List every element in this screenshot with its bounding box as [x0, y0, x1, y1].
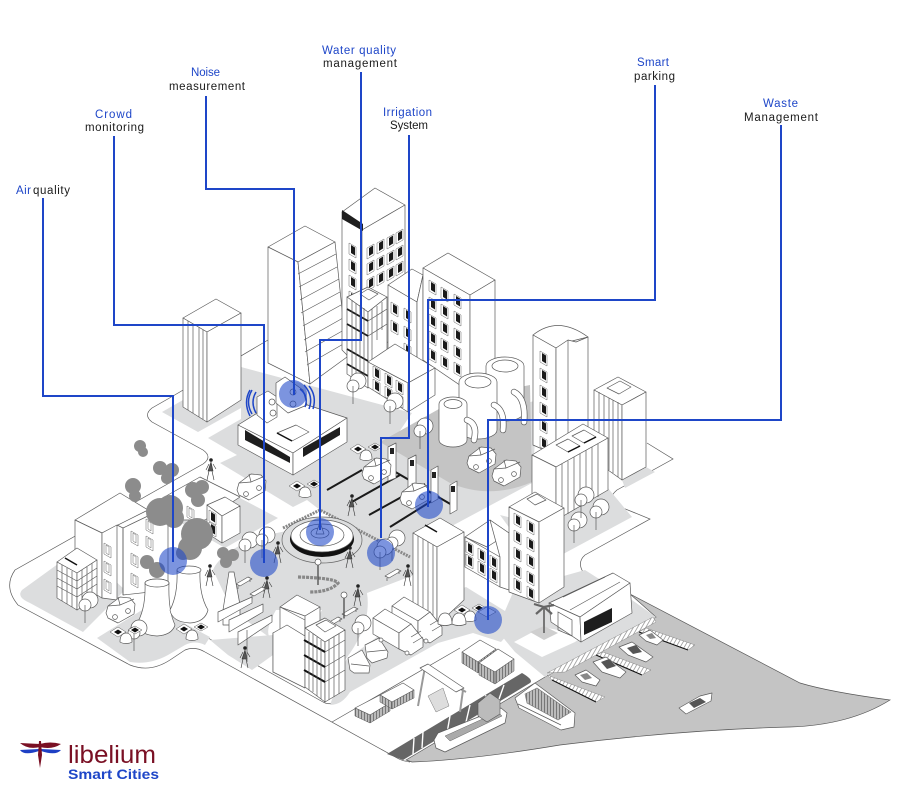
- label: smart parking: parking: [634, 71, 675, 83]
- building: central tall tower: [413, 518, 464, 625]
- water: [406, 594, 890, 762]
- leader line: waste management: [488, 125, 781, 620]
- furniture crates: [348, 615, 388, 673]
- sensor highlight: noise: [279, 380, 307, 408]
- building: left tower: [183, 299, 241, 422]
- leader line: noise measurement: [206, 96, 294, 395]
- fountain: [282, 510, 410, 592]
- label: waste management: Management: [744, 112, 819, 124]
- quay stripes: [387, 673, 531, 760]
- building: low windowed behind: [465, 520, 509, 590]
- sensor highlight: water quality: [306, 518, 334, 546]
- boats: [575, 630, 712, 714]
- sensor highlight: waste: [474, 606, 502, 634]
- plaza trees, benches and lamps: [236, 527, 405, 629]
- building: tall with windows: [342, 188, 405, 370]
- label: air quality: quality: [33, 185, 70, 197]
- factory with saw-tooth roof: [218, 572, 272, 662]
- label: noise measurement: [169, 67, 246, 93]
- smoke clouds: [125, 440, 239, 578]
- leader line: irrigation system: [381, 135, 409, 538]
- label: air quality: Air: [16, 185, 31, 197]
- leader line: air quality: [43, 198, 173, 562]
- label: water quality management: [322, 45, 398, 70]
- people in plaza: [205, 458, 413, 668]
- waste bins on plaza: [289, 443, 382, 498]
- label: smart parking: [634, 57, 675, 83]
- label: crowd monitoring: monitoring: [85, 122, 144, 134]
- icon: sound waves left: [246, 390, 256, 416]
- sensor highlight: smart parking: [415, 491, 443, 519]
- label: smart parking: Smart: [637, 57, 670, 69]
- sensor highlight: irrigation: [367, 539, 395, 567]
- dock building: [549, 573, 632, 642]
- sensor highlight: air quality: [159, 547, 187, 575]
- dark parking area: [380, 385, 532, 491]
- logo: libelium Smart Cities: Smart Cities: [68, 766, 159, 782]
- logo: libelium Smart Cities: [20, 741, 159, 782]
- trees and bins lower left: [79, 592, 208, 651]
- icon: sound waves right: [300, 385, 314, 409]
- leader line: water quality management: [320, 72, 361, 530]
- label: water quality management: Water quality: [322, 45, 396, 57]
- marina piers: [547, 617, 695, 702]
- label: air quality: [16, 185, 70, 197]
- crane: [418, 664, 466, 712]
- label: noise measurement: measurement: [169, 81, 246, 93]
- parking markings and chargers: [237, 443, 521, 527]
- building: left apartments: [75, 493, 168, 600]
- building: small right of factory: [150, 477, 240, 543]
- building: windowed block: [423, 253, 495, 392]
- ground: road outline and lots: [10, 340, 673, 762]
- label: irrigation system: System: [390, 120, 428, 132]
- building: grid block: [57, 548, 97, 610]
- sensor highlight: crowd monitoring: [250, 549, 278, 577]
- building: ribbed block: [532, 424, 608, 520]
- trucks: [373, 597, 442, 655]
- building: right windowed tower: [509, 492, 564, 603]
- label: noise measurement: Noise: [191, 67, 220, 79]
- trees: by low block: [347, 373, 433, 449]
- leader line: crowd monitoring: [114, 136, 264, 563]
- building: curved right tower: [533, 325, 588, 455]
- building: far right tower: [594, 377, 646, 480]
- label: irrigation system: [383, 107, 432, 132]
- leader line: smart parking: [428, 85, 655, 507]
- waste bags and bins: [438, 604, 496, 626]
- label: crowd monitoring: Crowd: [95, 109, 132, 121]
- cargo ships: [434, 683, 575, 752]
- trees: right lot: [568, 487, 609, 543]
- building: low front block: [368, 344, 435, 412]
- building: twisted tower: [268, 226, 347, 384]
- containers yard: [355, 640, 514, 723]
- icon: speakers: [257, 377, 307, 423]
- label: crowd monitoring: [85, 109, 144, 134]
- building: mid block: [388, 269, 423, 392]
- cooling towers: [136, 566, 208, 636]
- building: lower stacked: [304, 618, 345, 702]
- label: waste management: Waste: [763, 98, 798, 110]
- building: small stacked with black bands: [347, 287, 387, 388]
- palm tree: [534, 604, 554, 633]
- building: lower block: [273, 595, 320, 688]
- logo: libelium Smart Cities: libelium: [68, 741, 156, 769]
- label: irrigation system: Irrigation: [383, 107, 432, 119]
- label: waste management: [744, 98, 819, 124]
- label: water quality management: management: [323, 58, 398, 70]
- building: central low hall with speakers: [238, 377, 347, 475]
- storage tanks: [439, 357, 524, 447]
